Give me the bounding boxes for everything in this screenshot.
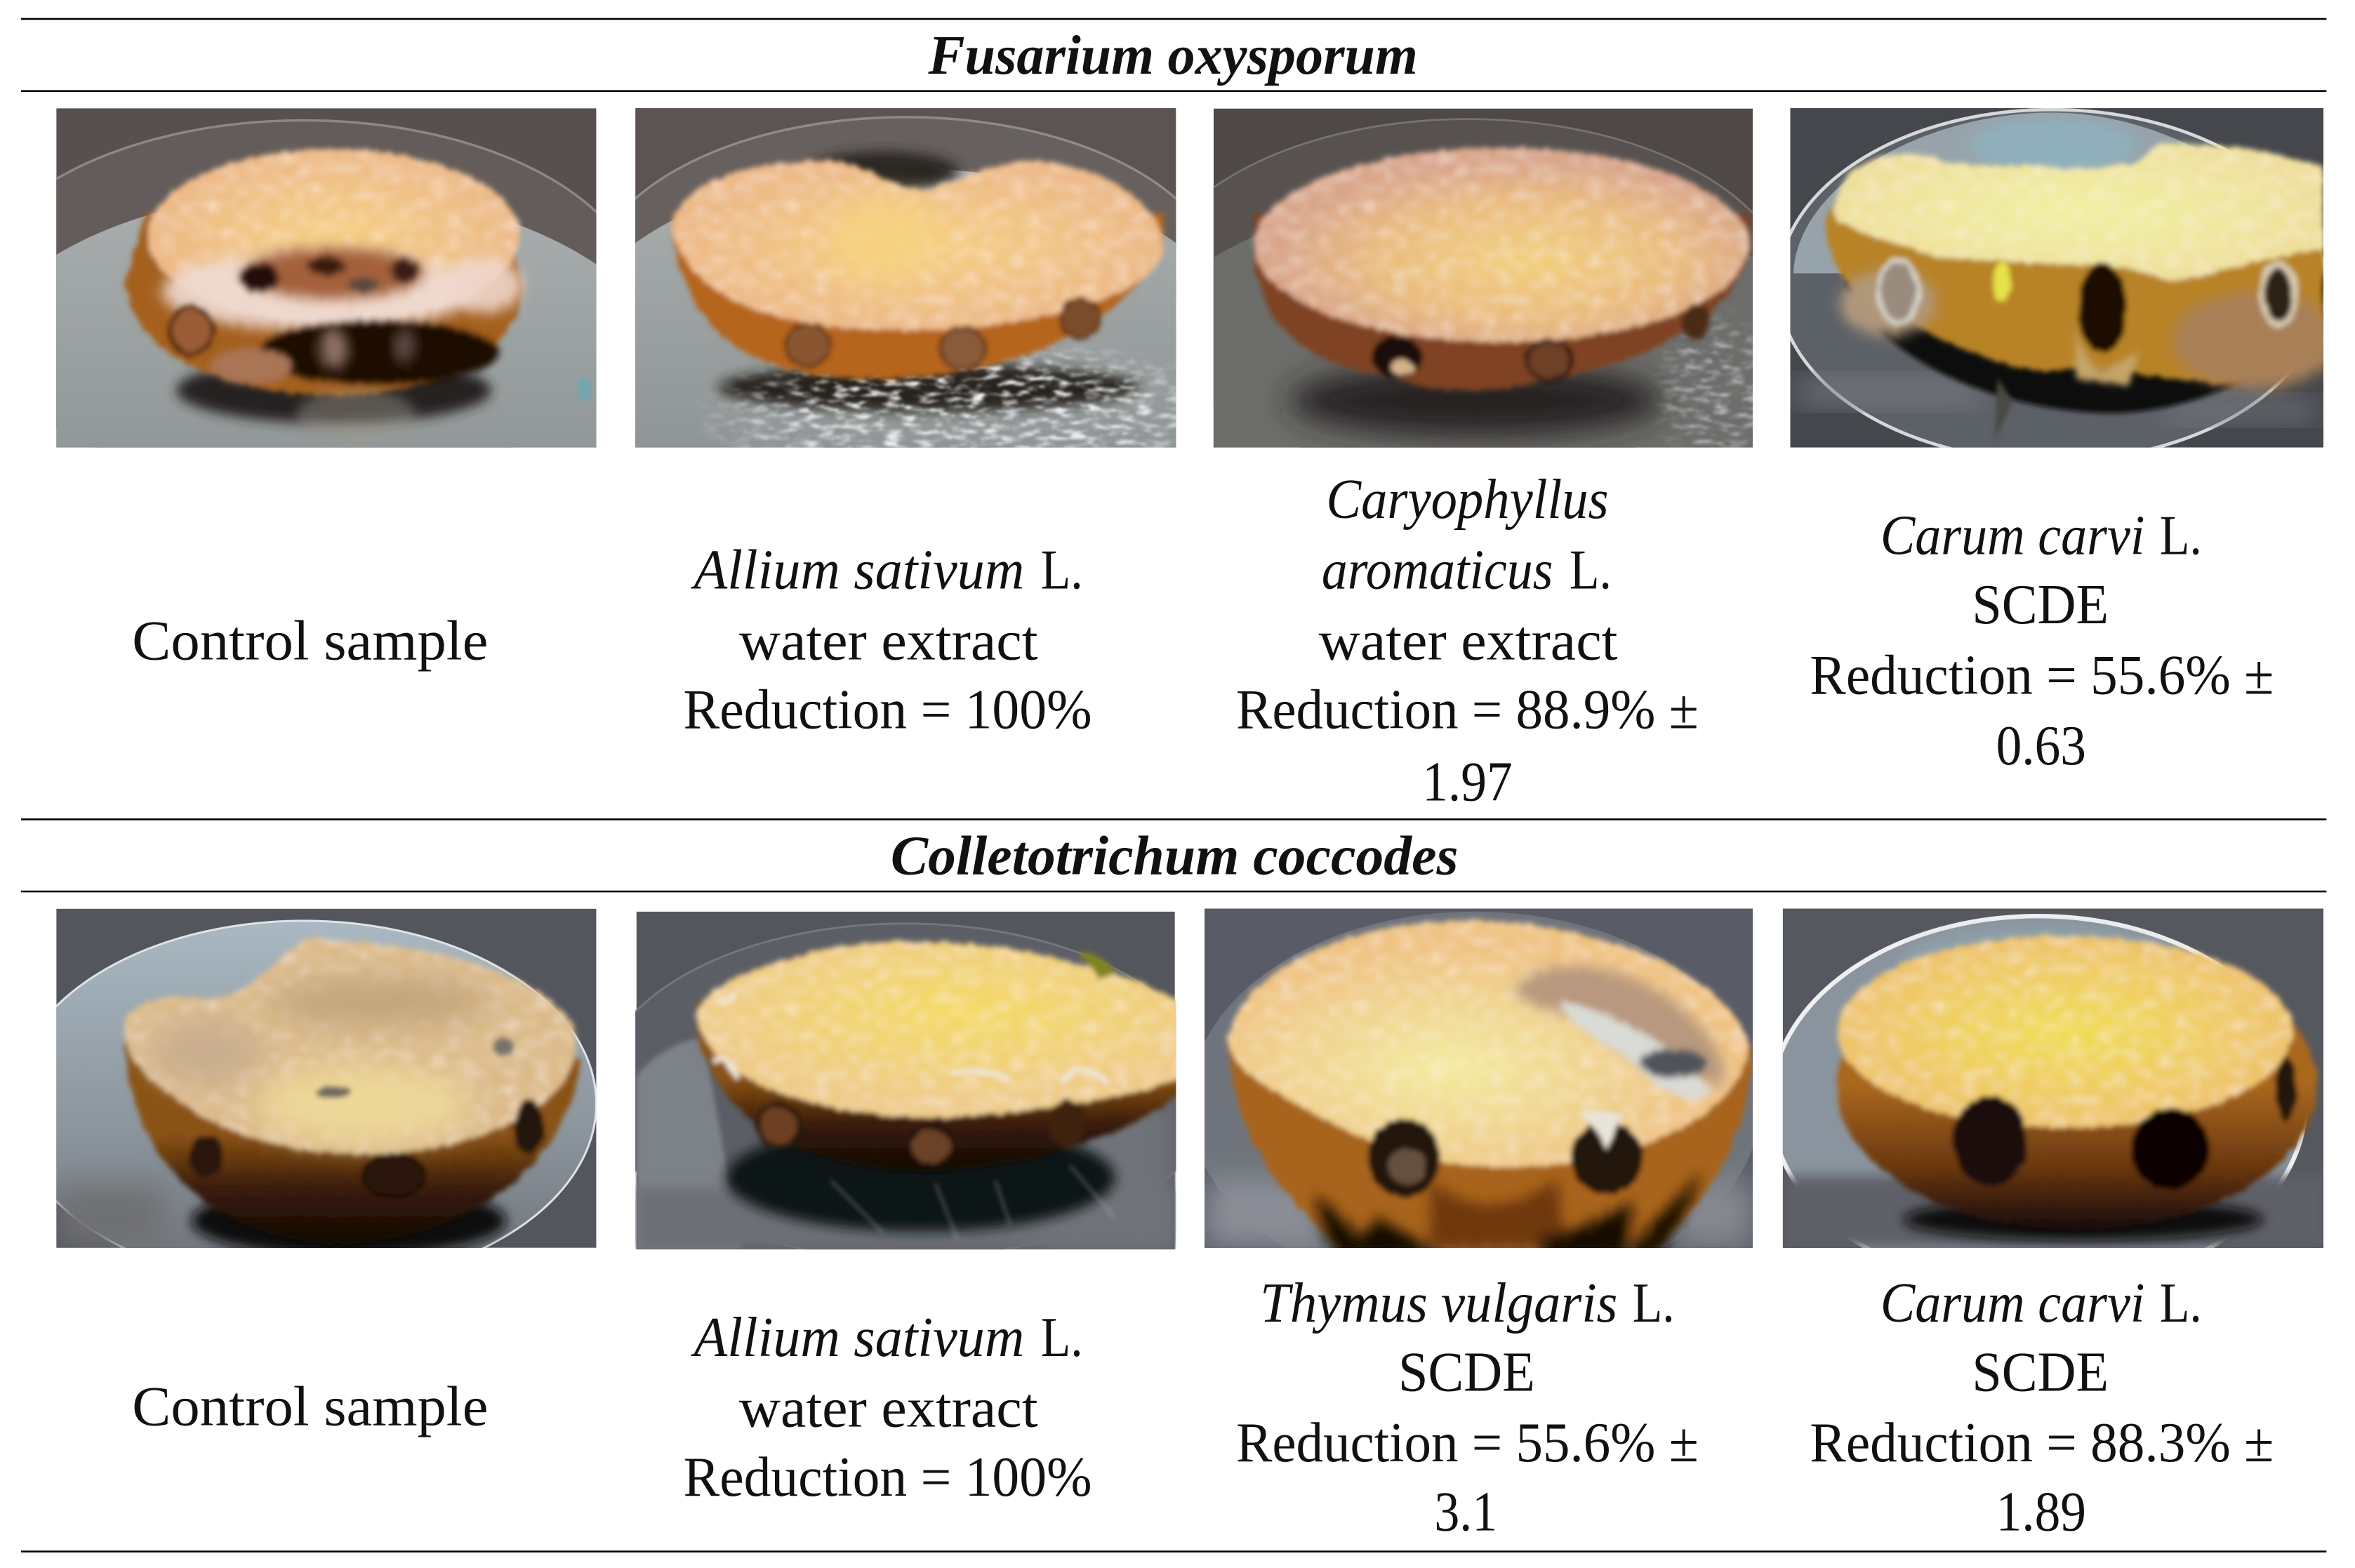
photo: Colletotrichum Thymus vulgaris (1205, 908, 1753, 1248)
label: Colletotrichum Carum carvi: 1.89 (1996, 1481, 2086, 1543)
bottom rule of table (21, 1550, 2326, 1553)
label: Fusarium Caryophyllus aromaticus: aromaticus (1322, 540, 1553, 602)
photo: Colletotrichum Carum carvi (1783, 908, 2323, 1248)
photo: Colletotrichum control sample (56, 908, 597, 1248)
label: Fusarium Allium sativum: water extract (739, 610, 1038, 672)
label: Fusarium Caryophyllus aromaticus: L. (1570, 540, 1612, 602)
top rule of table (21, 18, 2326, 20)
heading: Colletotrichum coccodes: Colletotrichum coccodes (891, 825, 1459, 886)
label: Fusarium Allium sativum: Reduction = 100% (684, 679, 1092, 741)
label: Fusarium Carum carvi: L. (2160, 505, 2202, 567)
label: Colletotrichum Allium sativum: water extract (739, 1378, 1038, 1440)
label: Fusarium Carum carvi: Reduction = 55.6% ± (1810, 645, 2274, 707)
photo: Fusarium Allium sativum (635, 108, 1176, 448)
label: Fusarium Allium sativum: Allium sativum (691, 540, 1024, 602)
label: Colletotrichum Carum carvi (1810, 1273, 2274, 1543)
label: Colletotrichum Thymus vulgaris: SCDE (1398, 1341, 1535, 1403)
label: Fusarium Caryophyllus aromaticus: 1.97 (1422, 751, 1513, 813)
photo: Colletotrichum Allium sativum (635, 911, 1176, 1249)
label: Fusarium Caryophyllus aromaticus: Caryophyllus (1326, 469, 1609, 531)
label: Colletotrichum Allium sativum (684, 1307, 1092, 1508)
label: Colletotrichum Allium sativum: Allium sativum (691, 1307, 1024, 1369)
label: Fusarium Allium sativum: L. (1041, 540, 1083, 602)
label: Colletotrichum Carum carvi: Carum carvi (1880, 1273, 2144, 1334)
label: Colletotrichum control: Control sample (132, 1376, 488, 1438)
photo: Fusarium control sample (56, 108, 597, 448)
label: Colletotrichum Thymus vulgaris: 3.1 (1434, 1481, 1497, 1543)
label: Fusarium control: Control sample (132, 610, 488, 672)
heading: Fusarium oxysporum: Fusarium oxysporum (927, 25, 1418, 86)
label: Fusarium Caryophyllus aromaticus: water extract (1319, 610, 1617, 672)
label: Colletotrichum Thymus vulgaris: Reduction = 55.6% ± (1236, 1412, 1699, 1474)
label: Fusarium Carum carvi: Carum carvi (1880, 505, 2144, 567)
label: Fusarium Caryophyllus aromaticus (1236, 469, 1699, 813)
label: Colletotrichum Carum carvi: SCDE (1972, 1341, 2109, 1403)
rule above Colletotrichum heading (21, 818, 2326, 820)
label: Colletotrichum Carum carvi: L. (2160, 1273, 2202, 1334)
label: Colletotrichum Carum carvi: Reduction = 88.3% ± (1810, 1412, 2274, 1474)
photo: Fusarium Carum carvi (1790, 108, 2323, 448)
label: Colletotrichum Allium sativum: L. (1041, 1307, 1083, 1369)
label: Colletotrichum Thymus vulgaris: Thymus vulgaris (1260, 1273, 1617, 1334)
label: Fusarium Carum carvi (1810, 505, 2274, 777)
label: Fusarium Carum carvi: SCDE (1972, 574, 2109, 636)
label: Colletotrichum Allium sativum: Reduction = 100% (684, 1447, 1092, 1508)
rule below Colletotrichum heading (21, 891, 2326, 892)
label: Fusarium Caryophyllus aromaticus: Reduction = 88.9% ± (1236, 679, 1699, 741)
label: Colletotrichum Thymus vulgaris: L. (1633, 1273, 1675, 1334)
photo: Fusarium Caryophyllus aromaticus (1213, 108, 1753, 448)
label: Fusarium Allium sativum (684, 540, 1092, 741)
rule below Fusarium heading (21, 90, 2326, 92)
label: Colletotrichum Thymus vulgaris (1236, 1273, 1699, 1543)
label: Fusarium Carum carvi: 0.63 (1996, 715, 2086, 777)
